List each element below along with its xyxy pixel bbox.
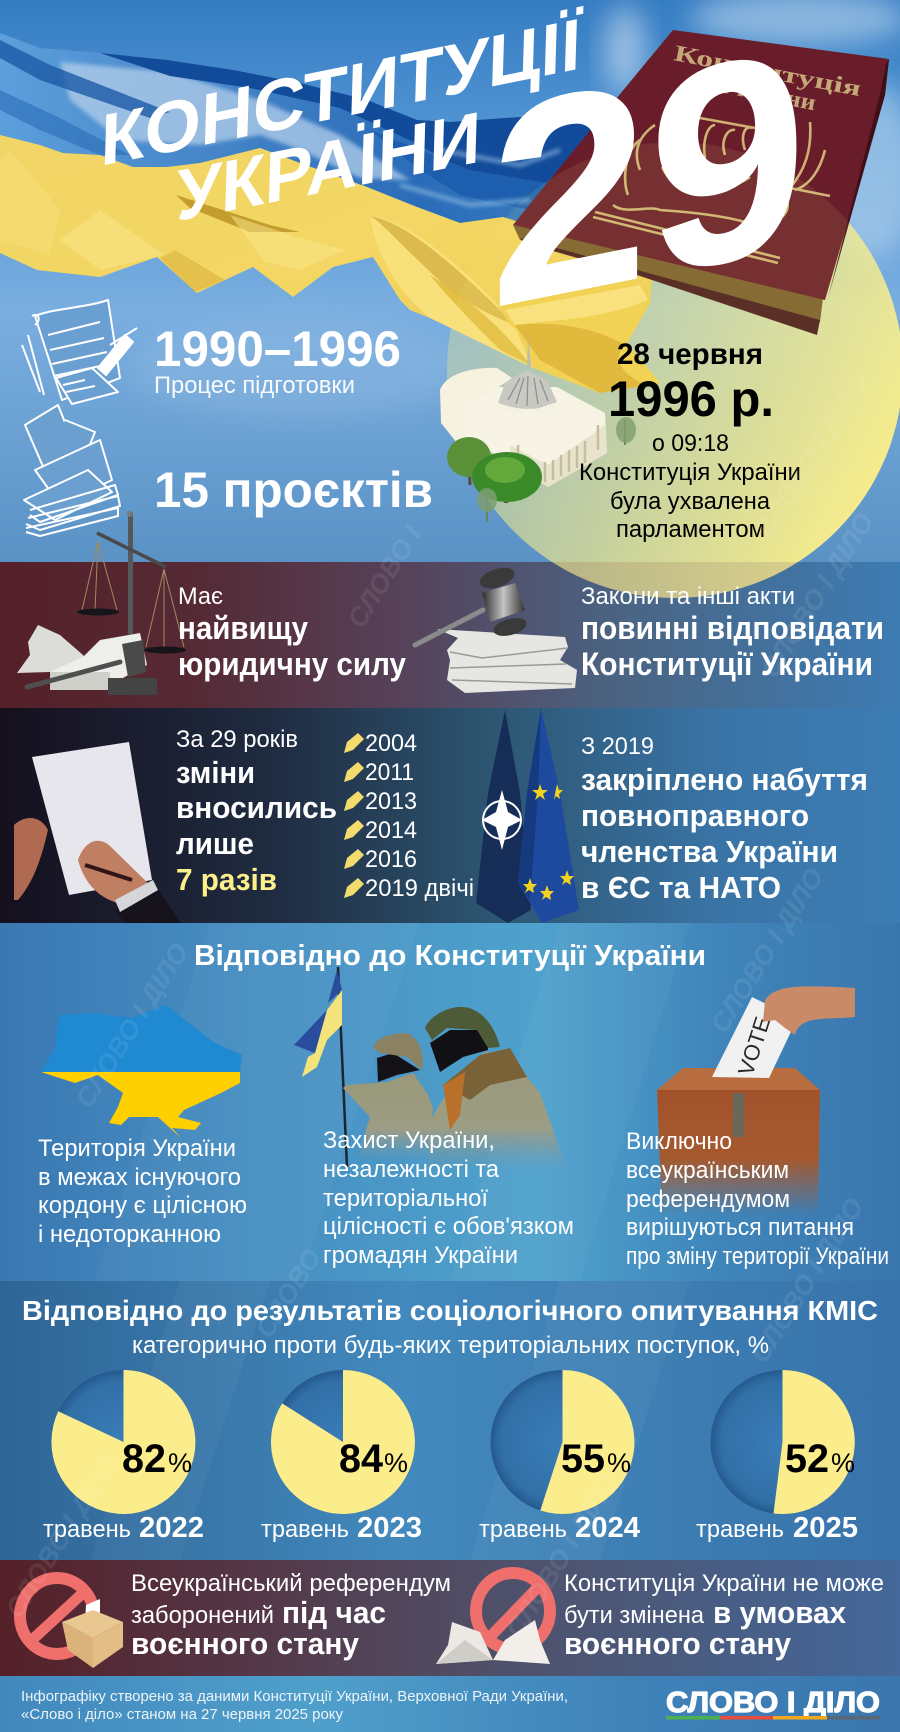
text: amended only 7 times: вносились — [176, 790, 337, 825]
adoption date block: Конституція України — [579, 459, 801, 486]
text: referendum — [626, 1128, 889, 1270]
adoption date block — [579, 338, 801, 543]
text: EU and NATO membership: закріплено набуття — [581, 762, 868, 797]
text: laws must comply: Конституції України — [581, 646, 873, 682]
list of amendment years: 2013 — [365, 788, 417, 815]
icon: gavel on documents — [415, 564, 577, 693]
text: defence duty: цілісності є обов'язком — [323, 1213, 574, 1240]
panel: legal force band — [0, 511, 900, 708]
icon: parliament building — [440, 337, 607, 487]
text: defence duty: громадян України — [323, 1242, 518, 1269]
icon: trees — [447, 417, 636, 522]
text: constitution cannot be changed: бути змінена — [564, 1602, 705, 1629]
subheading: категорично проти будь-яких територіальних поступок, % — [132, 1332, 769, 1359]
book cover title: України — [719, 72, 818, 115]
pie: May 2022: % — [168, 1448, 192, 1478]
pie: May 2022: травень — [43, 1516, 131, 1543]
pie: May 2024: 55 — [561, 1437, 605, 1481]
pie: May 2022: 2022 — [139, 1512, 204, 1544]
pie: May 2025: травень — [696, 1516, 784, 1543]
logo: СЛОВО І ДІЛО — [666, 1687, 880, 1719]
list of amendment years: 2016 — [365, 846, 417, 873]
heading: Відповідно до результатів соціологічного опитування КМІС — [22, 1295, 878, 1326]
15 projects: 15 проєктів — [154, 462, 433, 518]
list of amendment years: 2004 — [365, 730, 417, 757]
text: amended only 7 times: зміни — [176, 755, 255, 790]
heading: Відповідно до Конституції України — [194, 940, 706, 972]
panel: KIIS poll results — [0, 1281, 900, 1560]
text: referendum banned: заборонений — [131, 1602, 274, 1629]
watermarks: СЛОВО І ДІЛО — [500, 1468, 625, 1643]
panel: martial law restrictions — [0, 1560, 900, 1676]
decorative yellow circle — [447, 142, 900, 598]
icon: scales of justice — [77, 511, 186, 654]
text: supreme legal force: юридичну силу — [178, 646, 406, 682]
text: referendum: референдумом — [626, 1186, 790, 1213]
source note: «Слово і діло» станом на 27 червня 2025 року — [21, 1706, 343, 1723]
list of amendment years — [344, 730, 474, 902]
adoption date block: 1996 р. — [608, 371, 774, 427]
book cover title — [672, 40, 863, 115]
constitution book — [447, 30, 900, 598]
watermarks: СЛОВО І ДІЛО — [745, 1193, 870, 1368]
pie: May 2025: 52 — [785, 1437, 829, 1481]
text: laws must comply — [581, 583, 884, 682]
text: referendum: Виключно — [626, 1128, 732, 1155]
pie: May 2025: % — [831, 1448, 855, 1478]
text: EU and NATO membership — [581, 733, 868, 905]
text: supreme legal force: найвищу — [178, 610, 308, 646]
icon: stack of papers — [24, 405, 120, 536]
watermarks: СЛОВО І ДІЛО — [705, 863, 830, 1038]
icon: hands signing paper — [14, 742, 181, 923]
pie: May 2023: 2023 — [357, 1512, 422, 1544]
text: constitution cannot be changed — [564, 1570, 884, 1661]
pie: May 2024: % — [607, 1448, 631, 1478]
text: defence duty: територіальної — [323, 1185, 488, 1212]
panel: footer — [0, 1676, 900, 1732]
pie: May 2023: % — [384, 1448, 408, 1478]
adoption date block: парламентом — [616, 516, 765, 543]
source note — [21, 1688, 568, 1723]
text: territory: в межах існуючого — [38, 1164, 241, 1191]
text: EU and NATO membership: членства України — [581, 834, 838, 869]
text: constitution cannot be changed: в умовах — [713, 1595, 847, 1630]
book cover title: Конституція — [672, 40, 863, 101]
icon: soldiers with flag — [294, 967, 567, 1170]
watermarks: СЛОВО — [250, 1243, 327, 1343]
text: constitution cannot be changed: воєнного стану — [564, 1626, 792, 1661]
panel: according to the Constitution — [0, 923, 900, 1281]
1990-1996 preparation: 1990–1996 — [154, 321, 401, 377]
icon: sketch documents — [22, 300, 137, 404]
text: EU and NATO membership: повноправного — [581, 798, 809, 833]
icon: NATO and EU flags — [476, 708, 579, 923]
adoption date block: була ухвалена — [610, 488, 771, 515]
pie: May 2025: 2025 — [793, 1512, 858, 1544]
icon: map of Ukraine — [41, 1005, 242, 1138]
Ukrainian flag — [0, 33, 660, 393]
text: referendum banned: Всеукраїнський референдум — [131, 1570, 451, 1597]
title: КОНСТИТУЦІЇ — [100, 2, 584, 182]
text: territory: Територія України — [38, 1135, 236, 1162]
text: defence duty: незалежності та — [323, 1156, 500, 1183]
text: referendum banned: під час — [282, 1595, 386, 1630]
watermarks: СЛОВО І ДІЛО — [0, 1448, 125, 1623]
text: referendum banned: воєнного стану — [131, 1626, 360, 1661]
pie: May 2023: 84 — [339, 1437, 384, 1481]
text: territory: і недоторканною — [38, 1221, 221, 1248]
ballot label: VOTE — [733, 1014, 775, 1079]
text: referendum: всеукраїнським — [626, 1157, 789, 1184]
text: supreme legal force: Має — [178, 583, 223, 610]
background: sky — [0, 0, 900, 565]
title: УКРАЇНИ — [176, 95, 482, 237]
text: amended only 7 times: За 29 років — [176, 726, 298, 753]
text: amended only 7 times: 7 разів — [176, 862, 277, 897]
pie: May 2023: травень — [261, 1516, 349, 1543]
list of amendment years: 2014 — [365, 817, 417, 844]
text: referendum banned — [131, 1570, 451, 1661]
watermarks: СЛОВО І — [342, 520, 428, 633]
icon: open book with gavel — [17, 625, 157, 695]
adoption date block: о 09:18 — [652, 430, 729, 457]
icon: ballot box — [657, 986, 855, 1215]
text: laws must comply: повинні відповідати — [581, 610, 884, 646]
pie: May 2022 — [43, 1370, 204, 1544]
text: laws must comply: Закони та інші акти — [581, 583, 795, 610]
text: EU and NATO membership: в ЄС та НАТО — [581, 870, 781, 905]
text: referendum: вирішуються питання — [626, 1214, 854, 1241]
text: constitution cannot be changed: Конституція України не може — [564, 1570, 884, 1597]
list of amendment years: 2011 — [365, 759, 414, 786]
pie: May 2022: 82 — [122, 1437, 166, 1481]
text: supreme legal force — [178, 583, 406, 682]
pie: May 2024: 2024 — [575, 1512, 640, 1544]
source note: Інфографіку створено за даними Конституції України, Верховної Ради України, — [21, 1688, 568, 1705]
watermarks: СЛОВО І ДІЛО — [70, 938, 195, 1113]
pie: May 2024 — [479, 1370, 640, 1544]
text: defence duty: Захист України, — [323, 1127, 495, 1154]
watermarks — [0, 368, 880, 1643]
list of amendment years: 2019 двічі — [365, 875, 474, 902]
text: defence duty — [323, 1127, 574, 1269]
text: EU and NATO membership: З 2019 — [581, 733, 654, 760]
icon: banned ballot box — [20, 1578, 123, 1668]
text: amended only 7 times: лише — [176, 826, 254, 861]
icon: banned constitution book — [436, 1573, 550, 1664]
pie: May 2023 — [261, 1370, 422, 1544]
watermarks: СЛОВО І ДІЛО — [755, 508, 880, 683]
text: amended only 7 times — [176, 726, 337, 897]
watermarks: СЛОВО І ДІЛО — [750, 368, 875, 543]
text: territory — [38, 1135, 247, 1248]
text: territory: кордону є цілісною — [38, 1192, 247, 1219]
pie: May 2025 — [696, 1370, 858, 1544]
1990-1996 preparation: Процес підготовки — [154, 372, 355, 399]
panel: amendments and EU/NATO band — [0, 708, 900, 923]
adoption date block: 28 червня — [617, 338, 763, 371]
pie: May 2024: травень — [479, 1516, 567, 1543]
